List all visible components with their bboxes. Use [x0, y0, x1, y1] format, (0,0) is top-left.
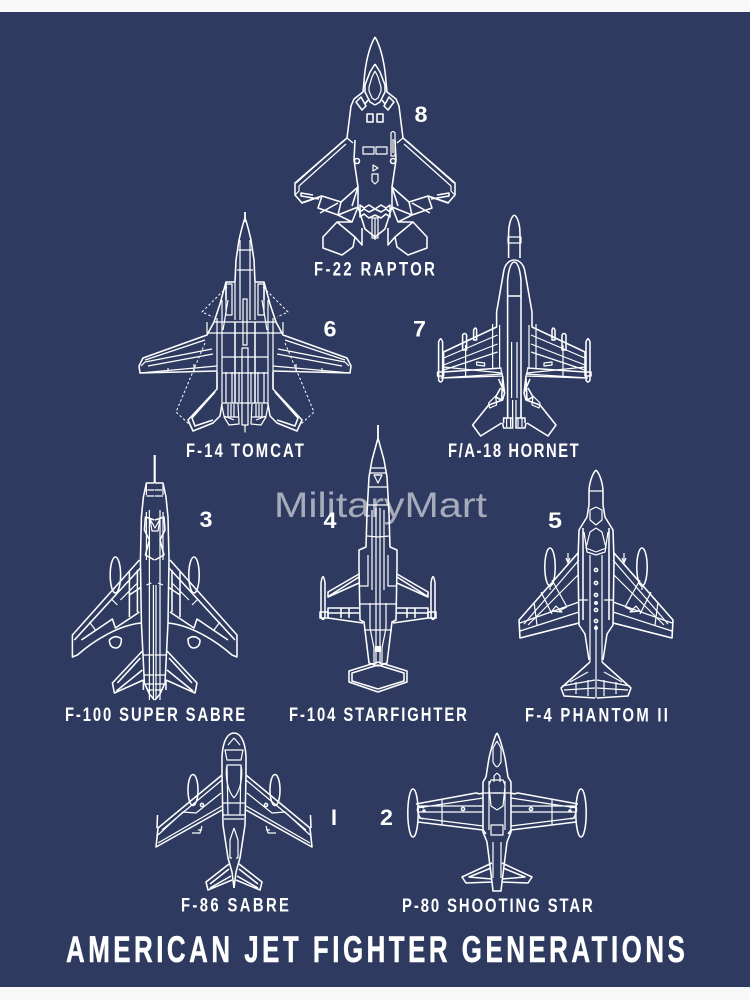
aircraft: F-22 Raptor — [295, 37, 455, 255]
F-100 canopy frame — [150, 519, 160, 531]
label: F-104 Starfighter: F-104 STARFIGHTER — [289, 703, 467, 726]
aircraft: F/A-18 Hornet — [438, 215, 591, 436]
label: F/A-18 Hornet: F/A-18 HORNET — [448, 439, 579, 462]
watermark: MilitaryMart — [274, 486, 487, 525]
F/A-18 left half — [438, 215, 515, 436]
F/A-18 canopy and nose bar — [508, 237, 521, 243]
label: F-86 Sabre: F-86 SABRE — [181, 893, 289, 916]
F-86 right half — [234, 733, 312, 890]
F-4 left half — [519, 470, 596, 698]
F-100 left half — [72, 455, 154, 700]
F-22 right half — [375, 37, 455, 255]
F-4 center rivets and tail — [595, 625, 597, 698]
label: P-80 Shooting Star: P-80 SHOOTING STAR — [402, 894, 593, 917]
label: F-4 Phantom II: F-4 PHANTOM II — [525, 703, 668, 726]
F-14 left half — [139, 212, 245, 431]
F/A-18 right half — [514, 215, 591, 436]
F-22 center details — [372, 132, 395, 240]
label: F-100 Super Sabre: F-100 SUPER SABRE — [65, 703, 245, 726]
label: F-14 Tomcat: F-14 TOMCAT — [186, 439, 304, 462]
P-80 left half — [408, 733, 501, 891]
F-14 center spine — [242, 299, 248, 432]
aircraft: P-80 Shooting Star — [408, 733, 586, 891]
label: F-22 Raptor: F-22 RAPTOR — [314, 257, 435, 280]
aircraft: F-100 Super Sabre — [72, 455, 237, 700]
number 4: 4 — [324, 508, 337, 533]
F-104 right half — [374, 425, 436, 692]
P-80 right half — [493, 733, 586, 891]
title: AMERICAN JET FIGHTER GENERATIONS — [66, 928, 685, 970]
F-86 left half — [156, 733, 234, 890]
F-100 right half — [155, 455, 237, 700]
aircraft: F-104 Starfighter — [320, 425, 436, 692]
number 2: 2 — [380, 805, 393, 830]
aircraft: F-14 Tomcat — [139, 212, 351, 432]
aircraft: F-4 Phantom II — [519, 470, 673, 698]
F-4 right half — [596, 470, 673, 698]
F-104 left half — [320, 425, 382, 692]
number 6: 6 — [324, 316, 336, 342]
F-14 right half — [245, 212, 351, 431]
number 7: 7 — [413, 316, 426, 342]
number 3: 3 — [200, 507, 212, 532]
F-22 left half — [295, 37, 375, 255]
aircraft: F-86 Sabre — [156, 733, 312, 890]
number 5: 5 — [548, 508, 562, 533]
number 1: I — [331, 805, 337, 830]
number 8: 8 — [414, 102, 428, 127]
